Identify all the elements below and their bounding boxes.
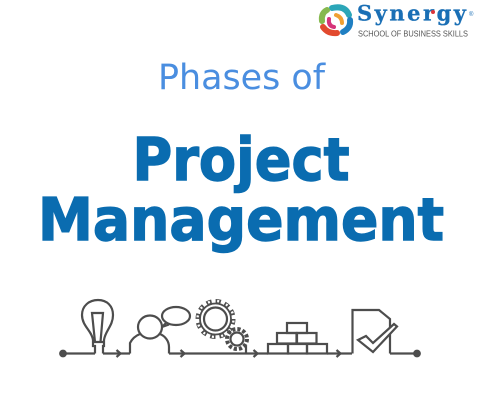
icon: light bulb	[82, 300, 113, 354]
process timeline illustration	[60, 300, 420, 357]
icon: brick stack	[268, 323, 327, 354]
title: Management: Management	[38, 185, 444, 254]
heading: Phases of: Phases of	[158, 58, 326, 98]
icon: logo swirl	[322, 7, 350, 33]
timeline segments and arrows	[60, 350, 420, 357]
logo: Synergy	[322, 0, 474, 38]
icon: document with checkmark	[352, 310, 397, 354]
logo red accent	[431, 10, 435, 14]
logo wordmark: Synergy	[357, 0, 467, 26]
icon: person with speech bubble	[130, 307, 190, 354]
title: Project: Project	[132, 125, 350, 194]
logo tagline: SCHOOL OF BUSINESS SKILLS	[358, 30, 468, 38]
icon: gears	[198, 301, 247, 354]
logo registered mark: ®	[469, 11, 474, 18]
